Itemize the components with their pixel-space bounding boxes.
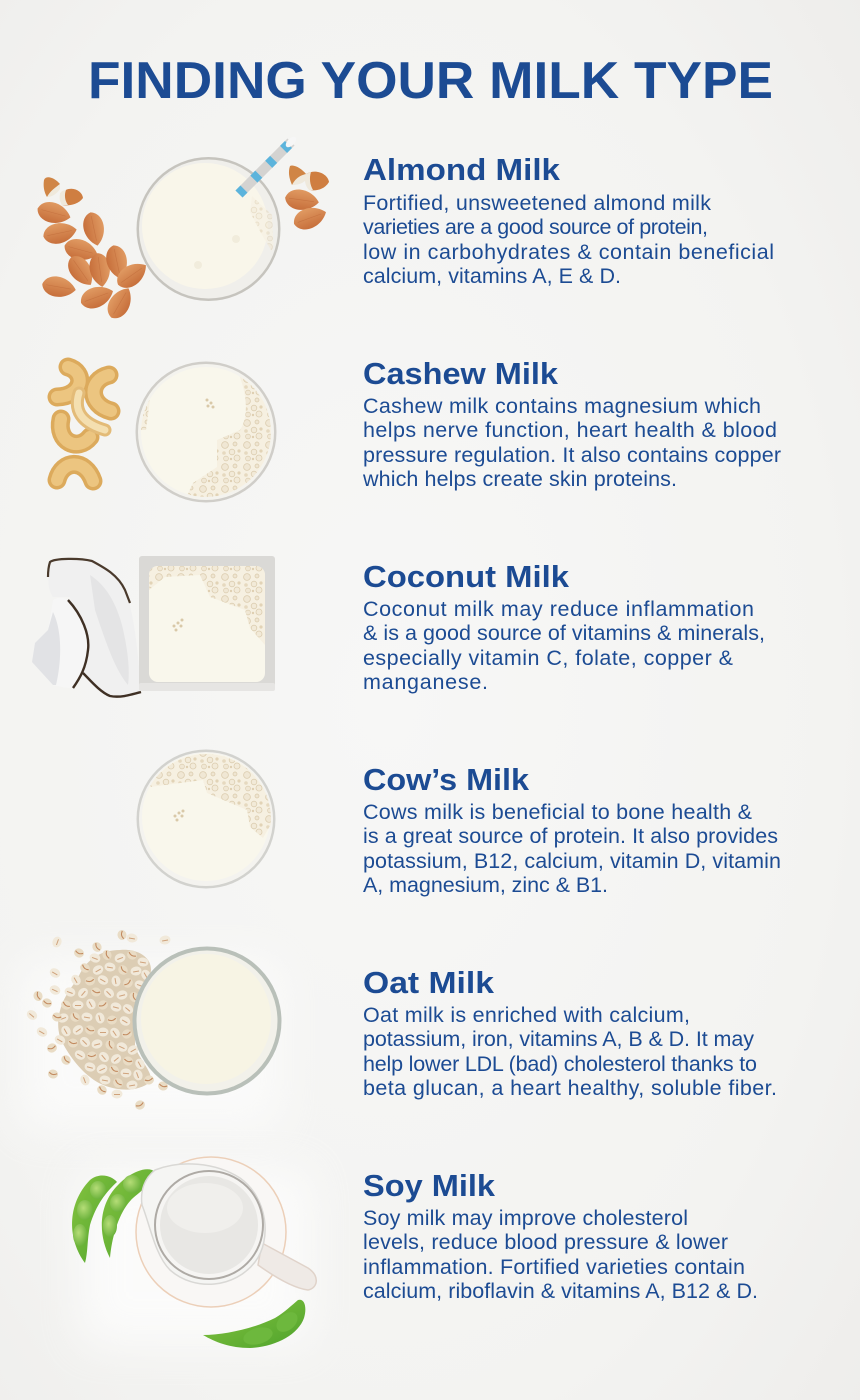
- text block: soy: Soy milk may improve cholesterol: [363, 1206, 688, 1230]
- icon: glass jug on saucer: [136, 1157, 316, 1307]
- title: FINDING YOUR MILK TYPE: [88, 52, 773, 110]
- text block: cashew: helps nerve function, heart health & blood: [363, 418, 777, 442]
- text block: soy: inflammation. Fortified varieties contain: [363, 1255, 745, 1279]
- text block: coconut: & is a good source of vitamins & minerals,: [363, 621, 765, 645]
- icon: cashews: [57, 367, 111, 481]
- panel: soy milk image: [72, 1157, 316, 1348]
- text block: cashew: Cashew milk contains magnesium which: [363, 394, 761, 418]
- icon: coconut milk square dish: [139, 556, 275, 691]
- text block: almond: low in carbohydrates & contain beneficial: [363, 240, 774, 264]
- icon: soy pods: [72, 1169, 305, 1348]
- text block: oat: potassium, iron, vitamins A, B & D. It may: [363, 1027, 754, 1051]
- text block: cashew: [362, 394, 781, 491]
- icon: coconut pieces: [32, 559, 141, 697]
- text block: cashew: pressure regulation. It also contains copper: [363, 443, 781, 467]
- heading: almond: Almond Milk: [363, 153, 560, 187]
- text block: oat: Oat milk is enriched with calcium,: [363, 1003, 690, 1027]
- panel: coconut milk image: [32, 556, 275, 697]
- text block: cow's: is a great source of protein. It also provides: [363, 824, 778, 848]
- text block: soy: levels, reduce blood pressure & lower: [363, 1230, 728, 1254]
- text block: cow's: A, magnesium, zinc & B1.: [363, 873, 608, 897]
- text block: almond: Fortified, unsweetened almond milk: [363, 191, 711, 215]
- text block: soy: [363, 1206, 758, 1303]
- text block: almond: varieties are a good source of protein,: [363, 215, 708, 239]
- icon: almonds left: [35, 177, 152, 323]
- text block: oat: [363, 1003, 777, 1100]
- heading: oat: Oat Milk: [363, 966, 494, 1000]
- icon: almonds right: [284, 166, 329, 233]
- heading: coconut: Coconut Milk: [363, 560, 569, 594]
- panel: almond milk image: [35, 135, 329, 323]
- text block: almond: [363, 191, 774, 288]
- text block: soy: calcium, riboflavin & vitamins A, B12 & D.: [363, 1279, 758, 1303]
- icon: cashew milk glass: [136, 362, 276, 502]
- heading: cow's: Cow’s Milk: [363, 763, 529, 797]
- text block: oat: help lower LDL (bad) cholesterol thanks to: [363, 1052, 757, 1076]
- text block: oat: beta glucan, a heart healthy, soluble fiber.: [363, 1076, 777, 1100]
- heading: soy: Soy Milk: [363, 1169, 495, 1203]
- heading: cashew: Cashew Milk: [363, 357, 558, 391]
- text block: cow's: [363, 800, 781, 897]
- icon: cow's milk glass: [136, 745, 285, 888]
- text block: cow's: Cows milk is beneficial to bone health &: [363, 800, 752, 824]
- text block: coconut: [363, 597, 765, 694]
- icon: almond milk glass: [136, 157, 280, 301]
- text block: coconut: especially vitamin C, folate, copper &: [363, 646, 733, 670]
- panel: cow's milk image: [136, 745, 285, 888]
- panel: oat milk image: [25, 929, 281, 1111]
- text block: coconut: manganese.: [363, 670, 488, 694]
- text block: almond: calcium, vitamins A, E & D.: [363, 264, 621, 288]
- icon: oat grains: [25, 929, 171, 1111]
- text block: cashew: which helps create skin proteins.: [362, 467, 677, 491]
- text block: cow's: potassium, B12, calcium, vitamin D, vitamin: [363, 849, 781, 873]
- panel: cashew milk image: [57, 362, 290, 505]
- icon: oat milk glass: [132, 946, 282, 1096]
- text block: coconut: Coconut milk may reduce inflammation: [363, 597, 754, 621]
- icon: striped straw: [239, 135, 298, 194]
